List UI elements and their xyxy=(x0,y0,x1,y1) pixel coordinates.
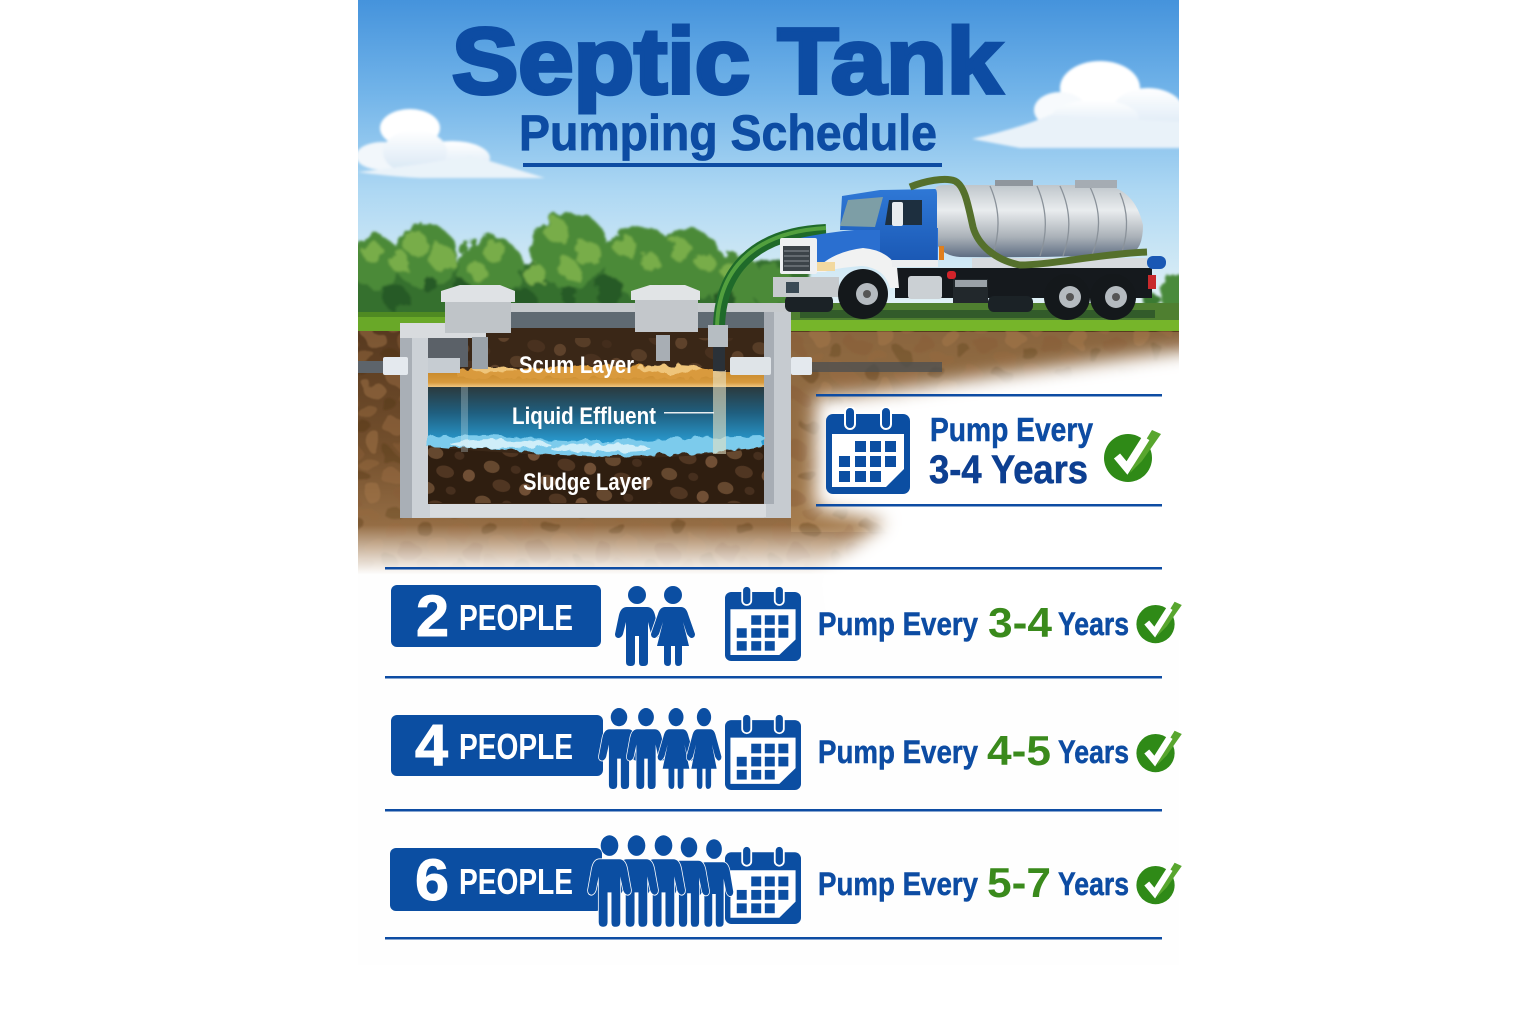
panel: 4 people row: 4-5 xyxy=(987,727,1051,774)
panel: 4 people row: PEOPLE xyxy=(459,726,573,767)
septic tank cross-section xyxy=(358,285,942,518)
panel: 4 people row xyxy=(385,676,1182,790)
trees xyxy=(340,212,1192,318)
riser pipes xyxy=(472,337,488,369)
fender xyxy=(815,248,899,288)
fuel tank xyxy=(908,276,942,299)
cloud: right xyxy=(972,61,1185,148)
panel: 2 people row: PEOPLE xyxy=(459,597,573,638)
windshield xyxy=(840,197,883,227)
mirror xyxy=(892,202,903,226)
tool box xyxy=(953,279,988,303)
chassis rail xyxy=(972,258,1148,269)
grass xyxy=(358,303,1179,331)
panel: 4 people row: Years xyxy=(1058,734,1129,770)
liquid effluent leader line xyxy=(664,412,714,414)
background panel xyxy=(358,0,1179,965)
sludge xyxy=(428,447,764,503)
cloud: left xyxy=(356,109,545,178)
scum foam xyxy=(458,365,720,378)
panel: 2 people row xyxy=(385,567,1182,666)
tank layer label: sludge: Sludge Layer xyxy=(523,469,650,496)
panel: 6 people row: PEOPLE xyxy=(459,861,573,902)
amber marker xyxy=(939,246,944,260)
pump truck xyxy=(773,179,1166,320)
panel: main schedule callout: 3-4 Years xyxy=(929,448,1088,492)
vacuum hose into tank xyxy=(708,228,826,371)
subtitle underline xyxy=(523,163,942,167)
concrete shell xyxy=(400,323,791,518)
panel: 6 people row: Pump Every xyxy=(818,866,978,902)
truck hose xyxy=(910,179,1147,265)
wheels xyxy=(838,269,1136,320)
tail light xyxy=(1148,275,1156,289)
tank layer label: scum: Scum Layer xyxy=(519,352,634,379)
rear blue cap xyxy=(1147,256,1166,269)
manhole covers xyxy=(445,302,511,333)
panel: 6 people row: Years xyxy=(1058,866,1129,902)
panel: 6 people row xyxy=(385,809,1182,940)
soil ground xyxy=(358,331,1179,572)
panel: 6 people row: 5-7 xyxy=(987,859,1051,906)
panel: 2 people row: Years xyxy=(1058,606,1129,642)
liquid xyxy=(428,387,764,445)
panel: 2 people row: Pump Every xyxy=(818,606,978,642)
panel: main schedule callout xyxy=(816,394,1162,506)
panel: 6 people row: 6 xyxy=(415,848,449,913)
tank layer label: liquid effluent: Liquid Effluent xyxy=(512,403,656,430)
inflow stream xyxy=(713,370,726,454)
subtitle: Pumping Schedule xyxy=(519,105,937,161)
title: Septic Tank xyxy=(452,9,1002,113)
bumper and hood xyxy=(773,277,839,297)
door window xyxy=(885,200,922,225)
panel: 4 people row: Pump Every xyxy=(818,734,978,770)
panel: main schedule callout: Pump Every xyxy=(930,411,1094,448)
foam xyxy=(428,435,764,456)
grille xyxy=(780,238,817,274)
sky xyxy=(358,0,1179,310)
panel: 2 people row: 3-4 xyxy=(988,599,1053,646)
tank hatches xyxy=(995,180,1033,186)
bottom slab xyxy=(430,504,766,517)
scum layer band xyxy=(428,372,764,387)
panel: 4 people row: 4 xyxy=(415,713,448,778)
truck tank xyxy=(933,185,1143,257)
inlet and outlet pipes xyxy=(358,361,384,373)
cab xyxy=(840,189,937,262)
panel: 2 people row: 2 xyxy=(416,584,449,649)
